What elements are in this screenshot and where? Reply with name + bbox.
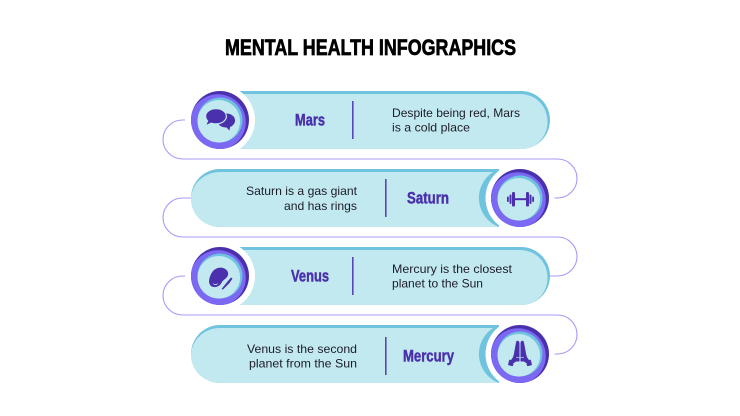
- icon: praying hands: [490, 325, 549, 384]
- text: Saturn description: Saturn is a gas giant: [246, 184, 358, 198]
- text: Mars description: is a cold place: [392, 120, 470, 134]
- icon: speech bubbles: [190, 91, 249, 150]
- label: Mars: Mars: [295, 112, 325, 130]
- panel: Mars: [185, 91, 550, 149]
- text: Venus description: planet to the Sun: [392, 276, 483, 290]
- label: Venus: Venus: [291, 268, 329, 286]
- text: Venus description: Mercury is the closest: [392, 262, 513, 276]
- text: Saturn description: and has rings: [284, 199, 357, 213]
- text: Mercury description: planet from the Sun: [249, 356, 357, 370]
- label: Mercury: Mercury: [403, 348, 455, 366]
- icon: palette: [190, 247, 249, 306]
- icon: dumbbell: [490, 169, 549, 228]
- title: MENTAL HEALTH INFOGRAPHICS: [225, 35, 516, 60]
- text: Mercury description: Venus is the second: [247, 342, 357, 356]
- panel: Venus: [185, 247, 550, 305]
- label: Saturn: Saturn: [407, 190, 449, 208]
- panel: Saturn: [191, 169, 554, 227]
- panel: Mercury: [191, 325, 554, 383]
- connector line: [163, 120, 577, 354]
- text: Mars description: Despite being red, Mars: [392, 106, 520, 120]
